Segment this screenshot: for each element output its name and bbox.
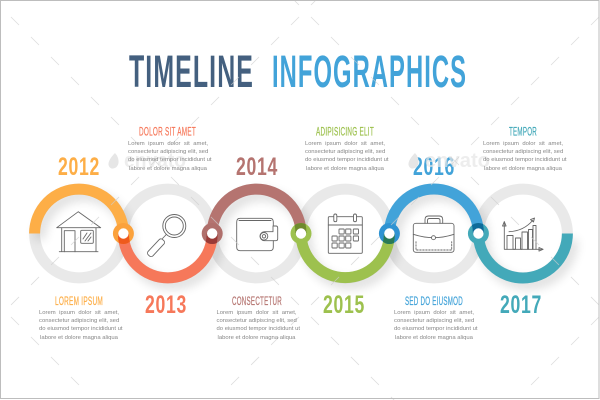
text: adipisicing elit paragraph (305, 140, 388, 172)
heading: lorem ipsum: LOREM IPSUM (55, 294, 103, 308)
junction 2013-2014 (202, 224, 223, 244)
text: sed do eiusmod paragraph: labore et dolore magna aliqua (395, 335, 473, 341)
arc shadows (40, 195, 572, 284)
text: sed do eiusmod paragraph (394, 310, 478, 341)
text: dolor sit amet paragraph: labore et dolore magna aliqua (129, 166, 207, 172)
text: dolor sit amet paragraph: do eiusmod tempor incididunt ut (128, 157, 212, 163)
heading: consectetur: CONSECTETUR (232, 294, 282, 308)
text: tempor paragraph (483, 140, 566, 172)
text: adipisicing elit paragraph: do eiusmod tempor incididunt ut (305, 157, 388, 163)
year 2017: 2017 (500, 291, 542, 319)
heading: adipisicing elit: ADIPISICING ELIT (316, 124, 374, 138)
text: consectetur paragraph: consectetur adipiscing elit, sed (216, 318, 297, 324)
icon: calendar (328, 214, 362, 253)
text: sed do eiusmod paragraph: do eiusmod tempor incididunt ut (394, 326, 478, 332)
year 2015: 2015 (323, 291, 365, 319)
text: consectetur paragraph: do eiusmod tempor incididunt ut (216, 326, 300, 332)
year 2014: 2014 (236, 153, 278, 181)
text: lorem ipsum paragraph: Lorem ipsum dolor sit amet, (39, 310, 119, 316)
grey base rings (35, 189, 567, 278)
heading: dolor sit amet: DOLOR SIT AMET (139, 124, 196, 138)
text: consectetur paragraph: labore et dolore magna aliqua (218, 335, 295, 341)
icon: growth chart (502, 218, 543, 251)
text: adipisicing elit paragraph: Lorem ipsum dolor sit amet, (305, 140, 385, 146)
text: adipisicing elit paragraph: consectetur adipiscing elit, sed (305, 149, 385, 155)
text: lorem ipsum paragraph: consectetur adipiscing elit, sed (39, 318, 119, 324)
text: tempor paragraph: do eiusmod tempor incididunt ut (483, 157, 566, 163)
watermark left: envato (124, 150, 186, 172)
text: sed do eiusmod paragraph: consectetur adipiscing elit, sed (394, 318, 474, 324)
text: lorem ipsum paragraph: do eiusmod tempor incididunt ut (39, 326, 122, 332)
junction 2014-2015 (290, 223, 312, 243)
junction 2016-2017 (468, 223, 489, 243)
text: tempor paragraph: labore et dolore magna aliqua (484, 166, 562, 172)
text: tempor paragraph: consectetur adipiscing elit, sed (483, 149, 563, 155)
year 2016: 2016 (413, 153, 455, 181)
text: dolor sit amet paragraph: consectetur adipiscing elit, sed (128, 149, 208, 155)
year 2013: 2013 (145, 291, 187, 319)
icon: house (57, 212, 101, 252)
text: sed do eiusmod paragraph: Lorem ipsum dolor sit amet, (394, 310, 474, 316)
text: adipisicing elit paragraph: labore et dolore magna aliqua (306, 166, 384, 172)
text: lorem ipsum paragraph: labore et dolore magna aliqua (40, 335, 118, 341)
junction 2012-2013 (112, 223, 134, 244)
text: dolor sit amet paragraph (128, 140, 212, 172)
icon: wallet (237, 218, 278, 251)
text: consectetur paragraph (216, 310, 300, 341)
year 2012: 2012 (58, 153, 100, 181)
heading: sed do eiusmod: SED DO EIUSMOD (405, 294, 463, 308)
text: dolor sit amet paragraph: Lorem ipsum dolor sit amet, (128, 140, 208, 146)
text: lorem ipsum paragraph (39, 310, 122, 341)
heading: tempor: TEMPOR (509, 124, 537, 138)
icon: briefcase (413, 216, 454, 252)
title: TIMELINE (129, 46, 254, 97)
text: consectetur paragraph: Lorem ipsum dolor sit amet, (216, 310, 296, 316)
junction 2015-2016 (378, 223, 400, 244)
title (129, 46, 467, 97)
watermark right: envato (425, 150, 490, 172)
icon: magnifying glass (146, 214, 186, 258)
timeline arcs (35, 189, 567, 278)
text: tempor paragraph: Lorem ipsum dolor sit amet, (483, 140, 563, 146)
